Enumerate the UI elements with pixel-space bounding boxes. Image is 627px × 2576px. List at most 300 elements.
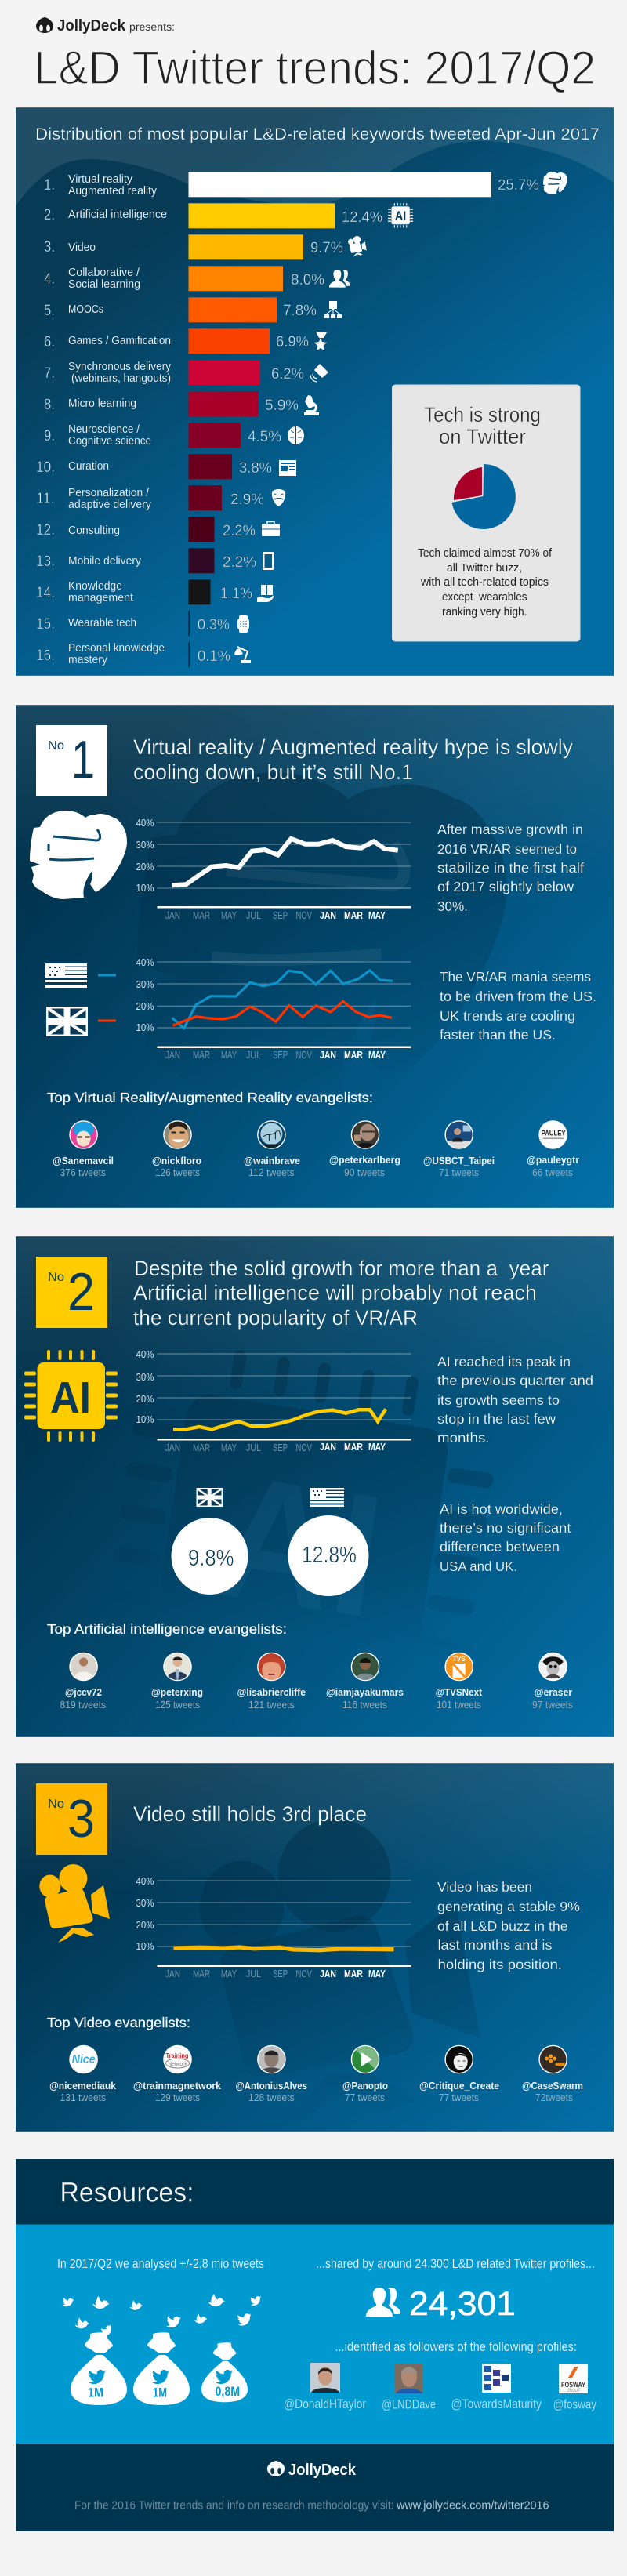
line chart: video share: NOV <box>296 1968 312 1979</box>
stat: 24,301 profiles: 24,301 <box>409 2285 516 2323</box>
line chart: AI share: JAN <box>320 1442 336 1453</box>
heading: AI evangelists: Top Artificial intelligence evangelists: <box>47 1621 287 1637</box>
line chart: video share: SEP <box>273 1968 288 1979</box>
text: video stable: last months and is <box>437 1937 553 1953</box>
line chart: AI share: MAR <box>344 1442 363 1453</box>
evangelist: peterxing: 125 tweets <box>155 1699 200 1711</box>
line chart: video share: MAY <box>221 1968 237 1979</box>
evangelist: iamjayakumars: @iamjayakumars <box>326 1686 404 1698</box>
row 1: virtual reality: 1. <box>44 177 55 194</box>
evangelist: iamjayakumars <box>326 1653 404 1711</box>
line chart: US vs UK: 20% <box>136 1001 154 1012</box>
evangelist: trainmagnetwork: Training <box>166 2052 189 2059</box>
profile: fosway: GROUP <box>567 2389 580 2393</box>
row 11: personalization: Personalization / <box>68 486 150 499</box>
row 14: knowledge management: 14. <box>36 585 55 601</box>
evangelist: nicemediauk: Nice <box>72 2053 96 2066</box>
stat: UK 9.8% <box>171 1488 248 1595</box>
line chart: AI share: JUL <box>246 1442 261 1453</box>
text: AI peak: months. <box>437 1430 489 1446</box>
text: US vs UK: to be driven from the US. <box>440 989 596 1004</box>
line chart: VR/AR share: 20% <box>136 862 154 873</box>
text: video stable: Video has been <box>437 1879 532 1895</box>
line chart: US vs UK: 10% <box>136 1022 154 1033</box>
line chart: US vs UK: 40% <box>136 957 154 968</box>
rank badge: No 3: 3 <box>67 1789 95 1849</box>
row 15: wearable tech: 15. <box>36 616 55 633</box>
evangelist: jccv72: 819 tweets <box>60 1699 106 1711</box>
row 14: knowledge management: Knowledge <box>68 579 122 593</box>
callout text <box>418 546 553 619</box>
text: VR growth: stabilize in the first half <box>437 860 584 876</box>
line chart: VR/AR share: MAR <box>193 910 210 921</box>
callout text: with all tech-related topics <box>420 575 549 589</box>
text: VR growth: 30%. <box>437 898 468 914</box>
presents label: presents: <box>129 20 175 33</box>
profile: fosway: FOSWAY <box>561 2381 585 2389</box>
row 16: personal knowledge mastery: 0.1% <box>198 648 230 665</box>
row 9: neuroscience: 4.5% <box>248 429 281 445</box>
row 1: virtual reality: Virtual reality <box>68 172 132 186</box>
text: AI peak: the previous quarter and <box>437 1373 593 1388</box>
row 7: synchronous delivery: Synchronous delivery <box>68 360 171 373</box>
stat: US 12.8%: 12.8% <box>302 1543 357 1568</box>
line chart: US vs UK: 30% <box>136 979 154 990</box>
icon: satellite <box>310 364 328 382</box>
line chart: VR/AR share: 30% <box>136 840 154 851</box>
rank badge: No 3: No <box>48 1798 64 1811</box>
callout heading <box>425 406 539 444</box>
evangelist: pauleygtr: 66 tweets <box>532 1166 573 1178</box>
evangelist: CaseSwarm: 72tweets <box>535 2092 573 2103</box>
rank badge: No 1: 1 <box>71 730 95 789</box>
text: tweets analysed: In 2017/Q2 we analysed +/-2,8 mio tweets <box>57 2256 264 2271</box>
row 4: collaborative: 8.0% <box>291 272 324 288</box>
evangelist: lisabriercliffe <box>237 1653 306 1711</box>
evangelist: eraser: 97 tweets <box>532 1699 573 1711</box>
text: AI worldwide <box>440 1501 571 1574</box>
text: VR growth: of 2017 slightly below <box>437 879 574 894</box>
evangelist: trainmagnetwork: Network <box>168 2062 187 2067</box>
callout text: except wearables <box>442 590 527 604</box>
headline: Artificial intelligence will probably not reach <box>133 1281 537 1304</box>
callout heading: Tech is strong <box>424 403 541 426</box>
line chart: US vs UK: SEP <box>273 1050 288 1061</box>
icon: lamp <box>234 647 251 663</box>
evangelist: Sanemavcil: 376 tweets <box>60 1166 106 1178</box>
row 7: synchronous delivery <box>44 360 328 385</box>
evangelist: Critique_Create: 77 tweets <box>439 2092 479 2103</box>
headline: the current popularity of VR/AR <box>133 1306 418 1330</box>
row 11: personalization: adaptive delivery <box>68 498 151 511</box>
row 15: wearable tech: Wearable tech <box>68 616 136 629</box>
evangelist: Critique_Create <box>419 2045 499 2103</box>
panel: No 2 artificial intelligence: AI <box>205 1438 394 1655</box>
row 10: curation: 10. <box>36 459 55 476</box>
evangelist: pauleygtr <box>527 1120 579 1178</box>
line chart: US vs UK: MAY <box>368 1050 386 1061</box>
footer note: For the 2016 Twitter trends and info on research methodology visit: <box>74 2499 393 2512</box>
evangelist: wainbrave: 112 tweets <box>248 1166 295 1178</box>
heading: video evangelists: Top Video evangelists: <box>47 2015 190 2030</box>
row 9: neuroscience: Cognitive science <box>68 434 151 448</box>
row 11: personalization: 11. <box>36 491 55 507</box>
evangelist: iamjayakumars: 116 tweets <box>342 1699 387 1711</box>
line chart: video share: MAR <box>193 1968 210 1979</box>
footer logo: JollyDeck <box>267 2461 357 2479</box>
icon: AI chip <box>388 203 413 228</box>
heading: resources: Resources: <box>60 2178 194 2208</box>
panel: No 3 video <box>16 1763 614 2132</box>
line chart: AI share: 10% <box>136 1414 154 1425</box>
rank badge: No 1: No <box>48 739 64 753</box>
rank badge: No 2: No <box>48 1271 64 1284</box>
icon: AI chip: AI <box>50 1373 91 1423</box>
row 3: video: 3. <box>44 239 55 256</box>
evangelist: peterkarlberg <box>329 1120 400 1178</box>
row 9: neuroscience: Neuroscience / <box>68 423 140 436</box>
row 2: artificial intelligence: 2. <box>44 207 55 223</box>
line chart: VR/AR share: JAN <box>320 910 336 921</box>
text: AI peak: its growth seems to <box>437 1392 560 1408</box>
row 12: consulting: 2.2% <box>223 523 256 539</box>
text: video stable: of all L&D buzz in the <box>437 1918 567 1934</box>
line chart: video share: MAR <box>344 1968 363 1979</box>
evangelist: peterkarlberg: 90 tweets <box>344 1166 385 1178</box>
row 6: games: 6. <box>44 334 55 350</box>
icon: movie camera <box>39 1864 110 1943</box>
row 4: collaborative: 4. <box>44 271 55 288</box>
icon: bag 1M: 1M <box>88 2385 103 2400</box>
line chart: video share: MAY <box>368 1968 386 1979</box>
evangelist: AntoniusAlves: @AntoniusAlves <box>235 2080 307 2092</box>
text: VR growth: 2016 VR/AR seemed to <box>437 841 577 857</box>
row 5: MOOCs <box>44 297 342 322</box>
line chart: video share: JAN <box>320 1968 336 1979</box>
line chart: video share: JAN <box>165 1968 180 1979</box>
line chart: VR/AR share: MAR <box>344 910 363 921</box>
row 15: wearable tech: 0.3% <box>198 617 230 633</box>
evangelist: pauleygtr: PAULEY <box>542 1129 566 1137</box>
evangelist: AntoniusAlves <box>235 2045 307 2103</box>
row 4: collaborative <box>44 266 350 291</box>
row 10: curation: Curation <box>68 459 109 473</box>
icon: network <box>324 301 342 318</box>
row 10: curation: 3.8% <box>239 460 272 477</box>
legend: UK flag <box>46 1007 116 1036</box>
icon: phone <box>263 552 274 570</box>
icon: briefcase <box>262 522 280 536</box>
row 1: virtual reality <box>44 172 567 198</box>
row 10: curation <box>36 454 296 479</box>
text: AI worldwide: USA and UK. <box>440 1558 517 1574</box>
callout: tech is strong <box>392 385 580 641</box>
row 4: collaborative: Social learning <box>68 278 140 291</box>
text: VR growth: After massive growth in <box>437 822 583 837</box>
row 3: video: 9.7% <box>310 240 343 256</box>
text: video stable: generating a stable 9% <box>437 1899 580 1914</box>
icon: AI chip <box>24 1350 118 1442</box>
text: identified as followers: ...identified as followers of the following profiles: <box>335 2339 577 2354</box>
panel: resources <box>16 2159 614 2531</box>
evangelist: Panopto <box>342 2045 388 2103</box>
evangelist: Panopto: @Panopto <box>342 2080 388 2092</box>
text: US vs UK: faster than the US. <box>440 1027 556 1043</box>
line chart: AI share: MAY <box>368 1442 386 1453</box>
icon: bag 0,8M <box>201 2342 248 2402</box>
line chart: US vs UK: MAR <box>193 1050 210 1061</box>
line chart: video share: 40% <box>136 1876 154 1887</box>
evangelist: eraser <box>532 1653 573 1711</box>
line chart: AI share: SEP <box>273 1442 288 1453</box>
rank badge: No 2: 2 <box>67 1262 95 1322</box>
heading: VR evangelists: Top Virtual Reality/Augmented Reality evangelists: <box>47 1090 373 1105</box>
row 1: virtual reality: Augmented reality <box>68 184 157 198</box>
row 16: personal knowledge mastery: Personal knowledge <box>68 641 165 655</box>
text: video stable: holding its position. <box>437 1957 562 1972</box>
icon: microscope <box>304 395 319 415</box>
line chart: VR/AR share: SEP <box>273 910 288 921</box>
icon: newspaper <box>279 460 296 476</box>
icon: VR head <box>543 172 567 194</box>
evangelist: jccv72: @jccv72 <box>65 1686 102 1698</box>
row 12: consulting: 12. <box>36 522 55 539</box>
rank badge: No 2 <box>36 1257 107 1328</box>
line chart: AI share: 40% <box>136 1349 154 1360</box>
evangelist: peterkarlberg: @peterkarlberg <box>329 1154 400 1166</box>
line chart: AI share: 20% <box>136 1394 154 1405</box>
text: VR growth <box>437 822 584 914</box>
line chart: US vs UK: JAN <box>320 1050 336 1061</box>
profile: DonaldHTaylor <box>284 2363 366 2411</box>
evangelist: CaseSwarm: @CaseSwarm <box>522 2080 583 2092</box>
row 14: knowledge management <box>36 579 274 604</box>
row 7: synchronous delivery: 7. <box>44 365 55 382</box>
icon: bag 1M <box>133 2332 190 2405</box>
evangelist: jccv72 <box>60 1653 106 1711</box>
evangelist: AntoniusAlves: 128 tweets <box>248 2092 295 2103</box>
icon: bag 1M: 1M <box>153 2385 167 2400</box>
row 13: mobile delivery: Mobile delivery <box>68 554 141 568</box>
panel heading: Distribution of most popular L&D-related keywords tweeted Apr-Jun 2017 <box>35 125 600 143</box>
icon: mask <box>272 489 285 506</box>
evangelist: USBCT_Taipei: 71 tweets <box>439 1166 479 1178</box>
evangelist: peterxing: @peterxing <box>151 1686 203 1698</box>
line chart: video share: 10% <box>136 1941 154 1952</box>
row 16: personal knowledge mastery: mastery <box>68 653 107 666</box>
row 5: MOOCs: 7.8% <box>283 303 317 319</box>
row 2: artificial intelligence: 12.4% <box>342 209 382 226</box>
line chart: AI share: MAY <box>221 1442 237 1453</box>
profile: fosway: @fosway <box>553 2397 596 2411</box>
callout text: all Twitter buzz, <box>447 561 522 575</box>
evangelist: trainmagnetwork <box>133 2045 222 2103</box>
title: L&D Twitter trends: 2017/Q2 <box>34 42 596 94</box>
line chart: AI share: JAN <box>165 1442 180 1453</box>
profile: TowardsMaturity: @TowardsMaturity <box>451 2396 542 2411</box>
line chart: AI share <box>136 1349 411 1453</box>
row 8: micro learning: 5.9% <box>265 397 299 414</box>
panel: No 2 artificial intelligence <box>16 1236 614 1744</box>
evangelist: nickfloro: @nickfloro <box>152 1155 201 1166</box>
line chart: AI share: NOV <box>296 1442 312 1453</box>
row 8: micro learning: Micro learning <box>68 397 136 410</box>
row 6: games: Games / Gamification <box>68 334 171 347</box>
rank badge: No 3 <box>36 1783 107 1855</box>
stat: 24,301 profiles <box>366 2285 516 2323</box>
line chart: US vs UK: JUL <box>246 1050 261 1061</box>
evangelist: Panopto: 77 tweets <box>345 2092 385 2103</box>
panel: keyword distribution <box>16 107 614 676</box>
evangelist: nicemediauk: @nicemediauk <box>49 2080 117 2092</box>
line chart: US vs UK: MAR <box>344 1050 363 1061</box>
profile: fosway <box>553 2364 596 2411</box>
evangelist: TVSNext: TVS <box>453 1655 466 1663</box>
icon: bag 0,8M: 0,8M <box>215 2384 240 2399</box>
callout text: Tech claimed almost 70% of <box>418 546 553 560</box>
row 16: personal knowledge mastery <box>36 641 251 667</box>
icon: brain <box>288 426 304 444</box>
line chart: video share <box>136 1876 411 1979</box>
icon: bag 1M <box>71 2332 127 2405</box>
icon: AI chip: AI <box>395 210 406 223</box>
line chart: US vs UK: JAN <box>165 1050 180 1061</box>
row 2: artificial intelligence <box>44 203 413 228</box>
row 3: video: Video <box>68 241 96 254</box>
callout text: ranking very high. <box>442 605 527 619</box>
icon: flying twitter birds <box>62 2293 262 2337</box>
icon: people <box>329 270 350 288</box>
line chart: AI share: 30% <box>136 1372 154 1383</box>
headline: Video still holds 3rd place <box>133 1802 367 1826</box>
line chart: US vs UK: MAY <box>221 1050 237 1061</box>
line chart: AI share: MAR <box>193 1442 210 1453</box>
line chart: VR/AR share: JUL <box>246 910 261 921</box>
icon: movie camera <box>348 236 367 257</box>
row 12: consulting <box>36 517 280 542</box>
row 12: consulting: Consulting <box>68 524 120 537</box>
panel: No 1 virtual reality <box>16 705 614 1208</box>
line chart: US vs UK: NOV <box>296 1050 312 1061</box>
row 11: personalization: 2.9% <box>230 492 264 508</box>
text: AI worldwide: there’s no significant <box>440 1520 571 1536</box>
evangelist: peterxing <box>151 1653 203 1711</box>
row 7: synchronous delivery: 6.2% <box>271 366 304 383</box>
stat: US 12.8% <box>288 1488 368 1596</box>
line chart: VR/AR share: 10% <box>136 883 154 894</box>
evangelist: Critique_Create: @Critique_Create <box>419 2080 499 2092</box>
legend: US flag <box>45 963 116 988</box>
callout heading: on Twitter <box>439 425 526 448</box>
headline: Virtual reality / Augmented reality hype is slowly <box>133 735 574 759</box>
text: US vs UK <box>440 969 596 1043</box>
rank badge: No 1 <box>36 725 107 796</box>
row 9: neuroscience <box>44 423 304 448</box>
row 15: wearable tech <box>36 611 249 636</box>
row 4: collaborative: Collaborative / <box>68 266 140 279</box>
profile: DonaldHTaylor: @DonaldHTaylor <box>284 2396 366 2411</box>
line chart: VR/AR share: JAN <box>165 910 180 921</box>
evangelist: lisabriercliffe: 121 tweets <box>248 1699 295 1711</box>
evangelist: trainmagnetwork: 129 tweets <box>155 2092 200 2103</box>
text: AI peak: stop in the last few <box>437 1411 556 1427</box>
stat: UK 9.8%: 9.8% <box>188 1546 234 1571</box>
footer logo: JollyDeck: JollyDeck <box>288 2462 357 2479</box>
text: AI worldwide: AI is hot worldwide, <box>440 1501 563 1517</box>
evangelist: Sanemavcil <box>53 1120 114 1178</box>
row 5: MOOCs: 5. <box>44 303 55 319</box>
line chart: VR/AR share <box>136 818 411 921</box>
row 2: artificial intelligence: Artificial intelligence <box>68 208 167 221</box>
evangelist: Sanemavcil: @Sanemavcil <box>53 1155 114 1166</box>
icon: watch <box>237 615 249 633</box>
evangelist: trainmagnetwork: @trainmagnetwork <box>133 2080 222 2092</box>
row 6: games: 6.9% <box>276 334 309 350</box>
evangelist: wainbrave <box>244 1120 300 1178</box>
text: AI worldwide: difference between <box>440 1539 560 1555</box>
headline: cooling down, but it’s still No.1 <box>133 760 413 784</box>
evangelist: lisabriercliffe: @lisabriercliffe <box>237 1686 306 1698</box>
row 8: micro learning: 8. <box>44 397 55 413</box>
row 11: personalization <box>36 485 285 511</box>
footer note: www.jollydeck.com/twitter2016 <box>396 2499 549 2512</box>
headline <box>133 735 574 784</box>
line chart: VR/AR share: NOV <box>296 910 312 921</box>
evangelist: TVSNext: @TVSNext <box>436 1686 483 1698</box>
line chart: video share: 30% <box>136 1898 154 1909</box>
row 16: personal knowledge mastery: 16. <box>36 648 55 664</box>
evangelist: pauleygtr: @pauleygtr <box>527 1154 579 1166</box>
headline <box>133 1257 549 1330</box>
row 3: video <box>44 234 367 259</box>
header <box>34 17 596 94</box>
profile: LNDDave <box>382 2364 436 2411</box>
text: AI peak <box>437 1354 593 1446</box>
line chart: video share: 20% <box>136 1920 154 1931</box>
evangelist: eraser: @eraser <box>535 1686 572 1698</box>
headline: Despite the solid growth for more than a year <box>134 1257 549 1280</box>
evangelist: CaseSwarm <box>522 2045 583 2103</box>
row 14: knowledge management: management <box>68 591 134 604</box>
evangelist: nickfloro: 126 tweets <box>155 1166 200 1178</box>
row 9: neuroscience: 9. <box>44 428 55 444</box>
evangelist: USBCT_Taipei: @USBCT_Taipei <box>423 1155 495 1166</box>
line chart: VR/AR share: MAY <box>221 910 237 921</box>
evangelist: TVSNext: 101 tweets <box>437 1699 481 1711</box>
profile: TowardsMaturity <box>451 2364 542 2411</box>
line chart: VR/AR share: MAY <box>368 910 386 921</box>
text: US vs UK: The VR/AR mania seems <box>440 969 591 985</box>
row 1: virtual reality: 25.7% <box>498 177 539 194</box>
evangelist: nicemediauk: 131 tweets <box>60 2092 106 2103</box>
profile: LNDDave: @LNDDave <box>382 2397 436 2411</box>
evangelist: USBCT_Taipei <box>423 1120 495 1178</box>
icon: hand and book <box>257 585 274 602</box>
text: US vs UK: UK trends are cooling <box>440 1008 575 1024</box>
logo: JollyDeck: JollyDeck <box>57 17 126 34</box>
row 13: mobile delivery: 2.2% <box>223 554 256 571</box>
row 13: mobile delivery <box>36 548 274 573</box>
text: AI peak: AI reached its peak in <box>437 1354 571 1370</box>
text: video stable <box>437 1879 580 1972</box>
evangelist: nicemediauk <box>49 2045 117 2103</box>
line chart: video share: JUL <box>246 1968 261 1979</box>
evangelist: TVSNext <box>436 1653 483 1711</box>
row 14: knowledge management: 1.1% <box>220 586 252 602</box>
icon: VR head <box>30 811 127 899</box>
pie chart <box>451 464 516 529</box>
line chart: VR/AR share: 40% <box>136 818 154 829</box>
